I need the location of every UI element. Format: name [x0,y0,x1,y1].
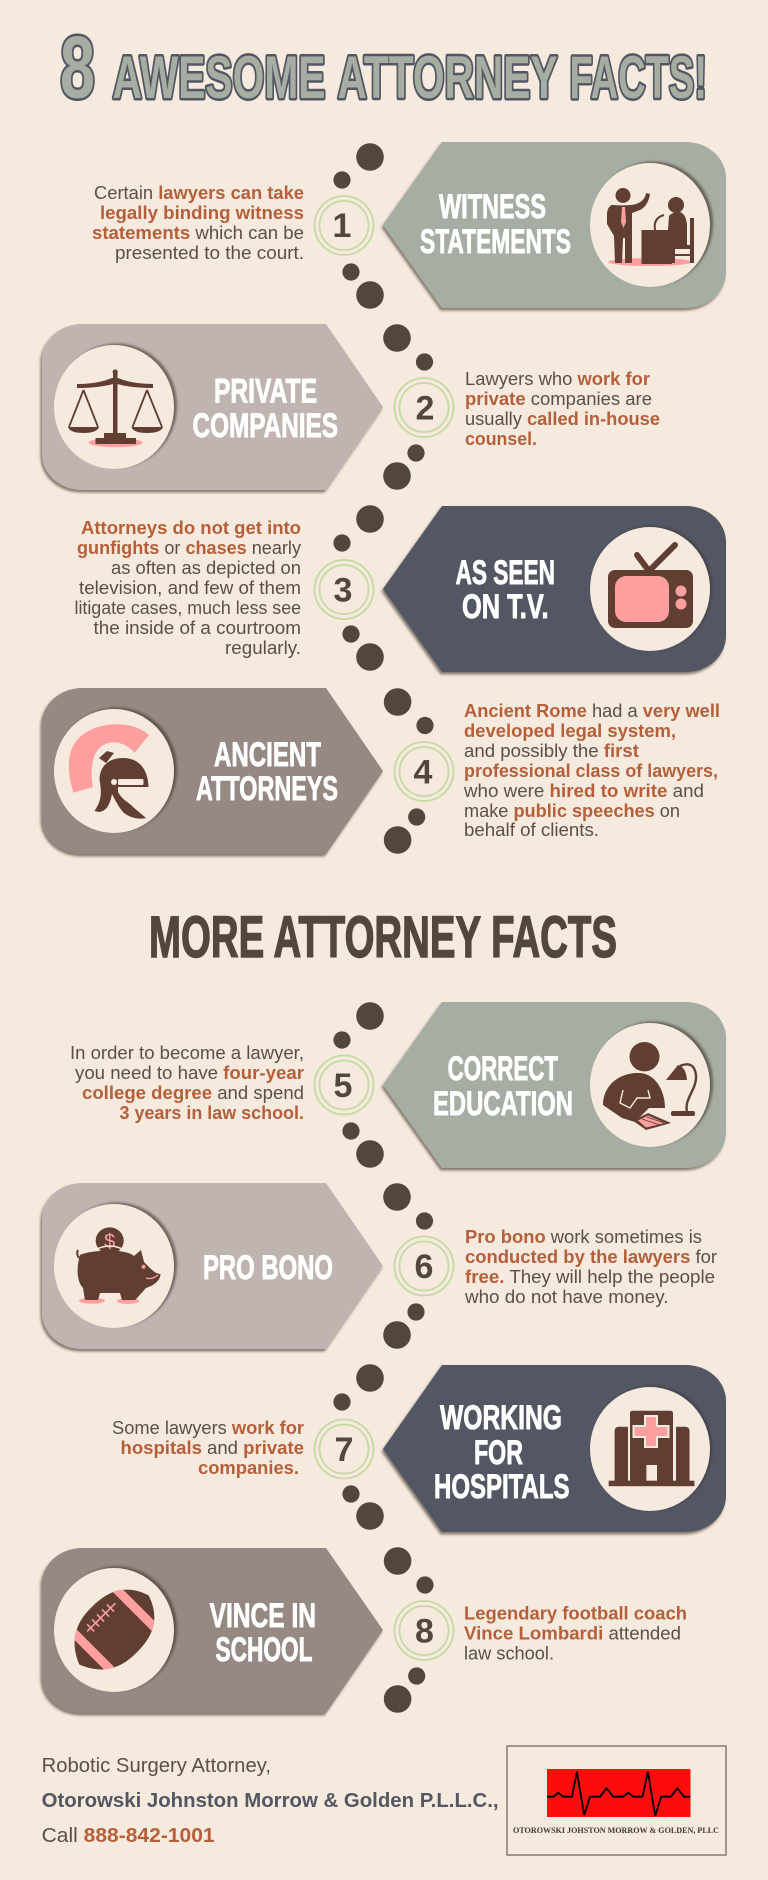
icon: piggy bank: $ [104,1231,115,1253]
dots and number 2: 2 [416,390,434,428]
heading: private companies: COMPANIES [192,407,338,445]
text: fact 2: counsel. [465,428,537,449]
text: fact 3: the inside of a courtroom [94,617,301,638]
text: fact 2: Lawyers who work for [465,368,650,389]
text: fact 8 [464,1602,687,1664]
panel: ancient attorneys [42,688,383,854]
text: fact 6: Pro bono work sometimes is [465,1226,702,1247]
text: fact 6 [464,1226,717,1307]
icon: hospital [609,1411,694,1486]
text: fact 3: as often as depicted on [111,557,301,578]
title: AWESOME [112,44,326,111]
dots and number 8 [384,1547,454,1713]
text: fact 5 [70,1042,304,1123]
heading: ancient attorneys [196,736,338,808]
panel: as seen on tv [383,506,726,672]
panel: vince in school [42,1548,383,1713]
heading: as seen on tv: AS SEEN [456,554,555,592]
footer contact text: Robotic Surgery Attorney, [42,1754,271,1777]
fact 3 [74,505,726,672]
panel: working for hospitals [383,1365,726,1532]
dots and number 4 [384,688,454,854]
text: fact 3: regularly. [225,637,301,658]
icon: piggy bank [77,1227,160,1304]
fact 1 [92,142,726,309]
panel: pro bono [42,1183,383,1349]
heading: working for hospitals [434,1399,570,1506]
text: fact 4: make public speeches on [464,800,680,821]
heading: working for hospitals: FOR [474,1434,523,1472]
heading: witness statements [420,188,571,261]
dots and number 5 [314,1002,384,1168]
icon: roman helmet [69,724,149,819]
heading: working for hospitals: WORKING [440,1399,562,1437]
text: fact 5: you need to have four-year [75,1062,304,1083]
footer contact text: Otorowski Johnston Morrow & Golden P.L.L.C., [42,1789,499,1812]
heading: working for hospitals: HOSPITALS [434,1468,570,1506]
footer contact text: Call 888-842-1001 [42,1824,215,1847]
text: fact 4: Ancient Rome had a very well [464,700,720,721]
text: fact 1 [92,182,304,263]
heading: correct education: CORRECT [448,1050,558,1088]
icon: student at desk with lamp [603,1042,696,1130]
dots and number 7 [314,1364,384,1530]
text: fact 2: private companies are [465,388,652,409]
fact 8 [42,1547,687,1713]
text: fact 4: behalf of clients. [464,819,599,840]
text: fact 4: professional class of lawyers, [464,760,718,781]
fact 4 [42,688,720,854]
icon: television [608,545,693,628]
text: fact 5: In order to become a lawyer, [70,1042,304,1063]
dots and number 1 [314,143,384,309]
footer contact text [42,1754,499,1847]
heading: vince in school: VINCE IN [210,1597,316,1635]
heading: vince in school: SCHOOL [216,1631,312,1669]
text: fact 4: and possibly the first [464,740,639,761]
heading: as seen on tv [456,554,555,626]
logo name: OTOROWSKI JOHSTON MORROW & GOLDEN, PLLC [513,1825,719,1835]
text: fact 3: Attorneys do not get into [81,517,301,538]
logo box [507,1746,726,1855]
text: fact 1: Certain lawyers can take [94,182,304,203]
logo: red heartbeat [547,1769,690,1817]
panel: witness statements [383,142,726,308]
title: 8 [60,18,95,116]
dots and number 8: 8 [415,1612,434,1650]
dots and number 6 [383,1183,454,1349]
heading: pro bono: PRO BONO [203,1249,333,1287]
text: fact 3 [74,517,302,658]
text: fact 6: free. They will help the people [465,1266,715,1287]
heading: as seen on tv: ON T.V. [462,588,548,626]
text: fact 1: statements which can be [92,222,304,243]
text: fact 4 [463,700,720,840]
text: fact 7: hospitals and private [120,1437,304,1458]
icon: scales of justice [68,369,163,447]
text: fact 4: who were hired to write and [463,780,704,801]
text: fact 5: 3 years in law school. [120,1102,304,1123]
fact 7 [112,1364,726,1532]
heading: private companies [192,372,338,445]
text: fact 2: usually called in-house [465,408,660,429]
dots and number 4: 4 [414,754,433,792]
text: fact 1: presented to the court. [115,242,304,263]
dots and number 7: 7 [335,1431,353,1469]
title [60,18,707,116]
text: fact 8: law school. [464,1642,554,1664]
fact 5 [70,1002,726,1168]
dots and number 3: 3 [334,572,352,610]
heading: correct education: EDUCATION [433,1085,573,1123]
heading: private companies: PRIVATE [214,372,317,410]
text: fact 3: television, and few of them [79,577,301,598]
text: fact 6: conducted by the lawyers for [465,1246,717,1267]
text: fact 8: Vince Lombardi attended [464,1622,681,1644]
fact 6 [42,1183,717,1349]
heading: ancient attorneys: ATTORNEYS [196,770,338,808]
heading: witness statements: WITNESS [439,188,546,226]
text: fact 3: gunfights or chases nearly [77,537,302,558]
text: fact 3: litigate cases, much less see [74,597,301,618]
title: ATTORNEY [338,44,558,111]
panel: private companies [42,324,383,490]
fact 2 [42,324,660,490]
heading: ancient attorneys: ANCIENT [214,736,321,774]
heading: correct education [433,1050,573,1123]
text: fact 5: college degree and spend [82,1082,304,1103]
text: fact 7: companies. [198,1457,299,1478]
text: fact 7 [112,1417,304,1478]
text: fact 6: who do not have money. [464,1286,668,1307]
text: fact 4: developed legal system, [464,720,676,741]
dots and number 6: 6 [415,1248,433,1286]
heading: witness statements: STATEMENTS [420,223,571,261]
dots and number 3 [314,505,384,671]
text: fact 8: Legendary football coach [464,1602,687,1624]
dots and number 5: 5 [334,1067,352,1105]
icon: football [74,1590,154,1670]
heading: vince in school [210,1597,316,1669]
panel: correct education [383,1002,726,1168]
text: fact 7: Some lawyers work for [112,1417,304,1438]
dots and number 1: 1 [333,207,351,245]
text: fact 1: legally binding witness [100,202,304,223]
icon: attorney questioning witness [607,188,694,266]
dots and number 2 [383,324,454,490]
text: fact 2 [465,368,660,449]
